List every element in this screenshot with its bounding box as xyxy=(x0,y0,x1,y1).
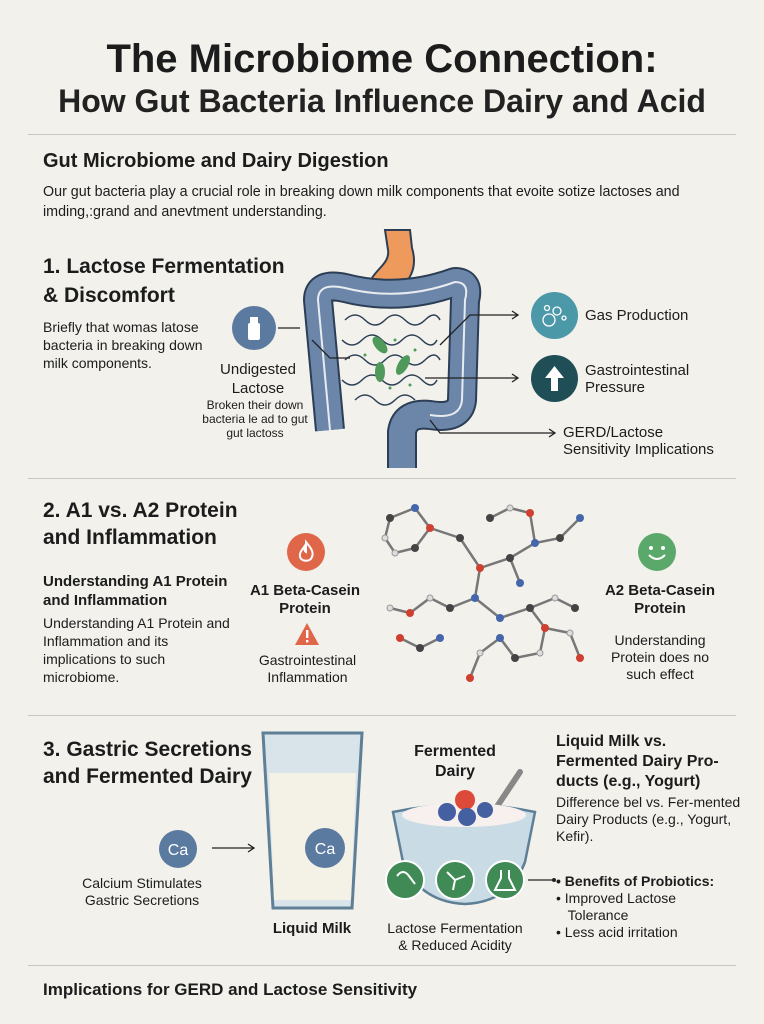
section 1 heading: 1. Lactose Fermentation xyxy=(43,255,285,278)
label: undigested lactose xyxy=(220,361,296,397)
label liquid milk: Liquid Milk xyxy=(273,920,351,937)
icon: pressure xyxy=(531,355,578,402)
label pressure: Pressure xyxy=(585,379,645,396)
section 2 subheading: Understanding A1 Protein xyxy=(43,573,227,590)
section 1 text: Briefly that womas latose bacteria in breaking down milk components. xyxy=(43,319,203,371)
label GERD: GERD/Lactose xyxy=(563,424,663,441)
section 1 heading: & Discomfort xyxy=(43,284,175,307)
benefits list: Tolerance xyxy=(568,907,628,923)
label: undigested lactose: Lactose xyxy=(232,380,284,397)
label pressure: Gastrointestinal xyxy=(585,362,689,379)
molecule xyxy=(382,504,584,682)
icon: gas xyxy=(531,292,578,339)
label fermented dairy: Fermented xyxy=(414,743,496,760)
label: undigested lactose: Undigested xyxy=(220,361,296,378)
label A2: Protein xyxy=(634,600,686,617)
A2 text: Understanding Protein does no such effect xyxy=(611,632,709,682)
label fermented dairy xyxy=(414,743,496,780)
intro text: Our gut bacteria play a crucial role in breaking down milk components that evoite sotize lactoses and imding,:grand and anevtment understanding. xyxy=(43,184,680,220)
intro heading: Gut Microbiome and Dairy Digestion xyxy=(43,150,389,172)
icon: fire xyxy=(287,533,325,571)
label lactose fermentation xyxy=(387,920,523,953)
section 2 text: Understanding A1 Protein and Inflammation and its implications to such microbiome. xyxy=(43,615,230,685)
benefits list: • Less acid irritation xyxy=(556,924,678,940)
section 3 heading: 3. Gastric Secretions xyxy=(43,738,252,761)
icon: calcium: Ca xyxy=(168,842,188,859)
label A1: Protein xyxy=(279,600,331,617)
section 2 heading xyxy=(43,499,238,549)
label inflammation xyxy=(259,652,356,685)
liquid vs fermented text xyxy=(556,733,740,844)
section 2 heading: and Inflammation xyxy=(43,526,217,549)
liquid vs fermented text: Difference bel vs. Fer-mented Dairy Products (e.g., Yogurt, Kefir). xyxy=(556,794,740,844)
label fermented dairy: Dairy xyxy=(435,763,475,780)
section 2 subheading: and Inflammation xyxy=(43,592,167,609)
label calcium xyxy=(82,875,202,908)
section 2 subheading xyxy=(43,573,227,609)
label GERD: Sensitivity Implications xyxy=(563,441,714,458)
label lactose fermentation: & Reduced Acidity xyxy=(398,937,512,953)
icons: probiotics xyxy=(385,860,525,900)
label A2 xyxy=(605,582,715,617)
bowl of yogurt xyxy=(392,769,536,906)
section 2 heading: 2. A1 vs. A2 Protein xyxy=(43,499,238,522)
footer: Implications for GERD and Lactose Sensitivity xyxy=(43,980,417,999)
label A2: A2 Beta-Casein xyxy=(605,582,715,599)
intestine illustration xyxy=(303,229,482,468)
section 1 heading xyxy=(43,255,285,307)
label inflammation: Gastrointestinal xyxy=(259,652,356,668)
icon: warning xyxy=(295,623,319,645)
label inflammation: Inflammation xyxy=(267,669,348,685)
liquid vs fermented text: Liquid Milk vs. Fermented Dairy Pro-ducts (e.g., Yogurt) xyxy=(556,733,719,790)
title: The Microbiome Connection: xyxy=(106,37,658,81)
icon: calcium xyxy=(159,830,197,868)
label A1: A1 Beta-Casein xyxy=(250,582,360,599)
small text: Broken their down bacteria le ad to gut gut lactoss xyxy=(202,398,308,440)
label calcium: Gastric Secretions xyxy=(85,892,199,908)
label calcium: Calcium Stimulates xyxy=(82,875,202,891)
probiotic connector xyxy=(528,878,556,882)
glass of milk: Ca xyxy=(315,841,335,858)
section 3 heading: and Fermented Dairy xyxy=(43,765,252,788)
title: How Gut Bacteria Influence Dairy and Acid xyxy=(58,83,706,119)
benefits list: • Improved Lactose xyxy=(556,890,676,906)
icon: smile xyxy=(638,533,676,571)
label GERD xyxy=(563,424,714,458)
icon: milk bottle xyxy=(232,306,276,350)
label lactose fermentation: Lactose Fermentation xyxy=(387,920,523,936)
benefits list xyxy=(556,873,714,940)
label A1 xyxy=(250,582,360,617)
label gas: Gas Production xyxy=(585,307,688,324)
arrows section 1 xyxy=(278,310,556,438)
title xyxy=(58,37,706,119)
glass of milk xyxy=(261,732,364,910)
arrow xyxy=(212,844,255,852)
label pressure xyxy=(585,362,689,396)
section 3 heading xyxy=(43,738,252,788)
benefits list: • Benefits of Probiotics: xyxy=(556,873,714,889)
